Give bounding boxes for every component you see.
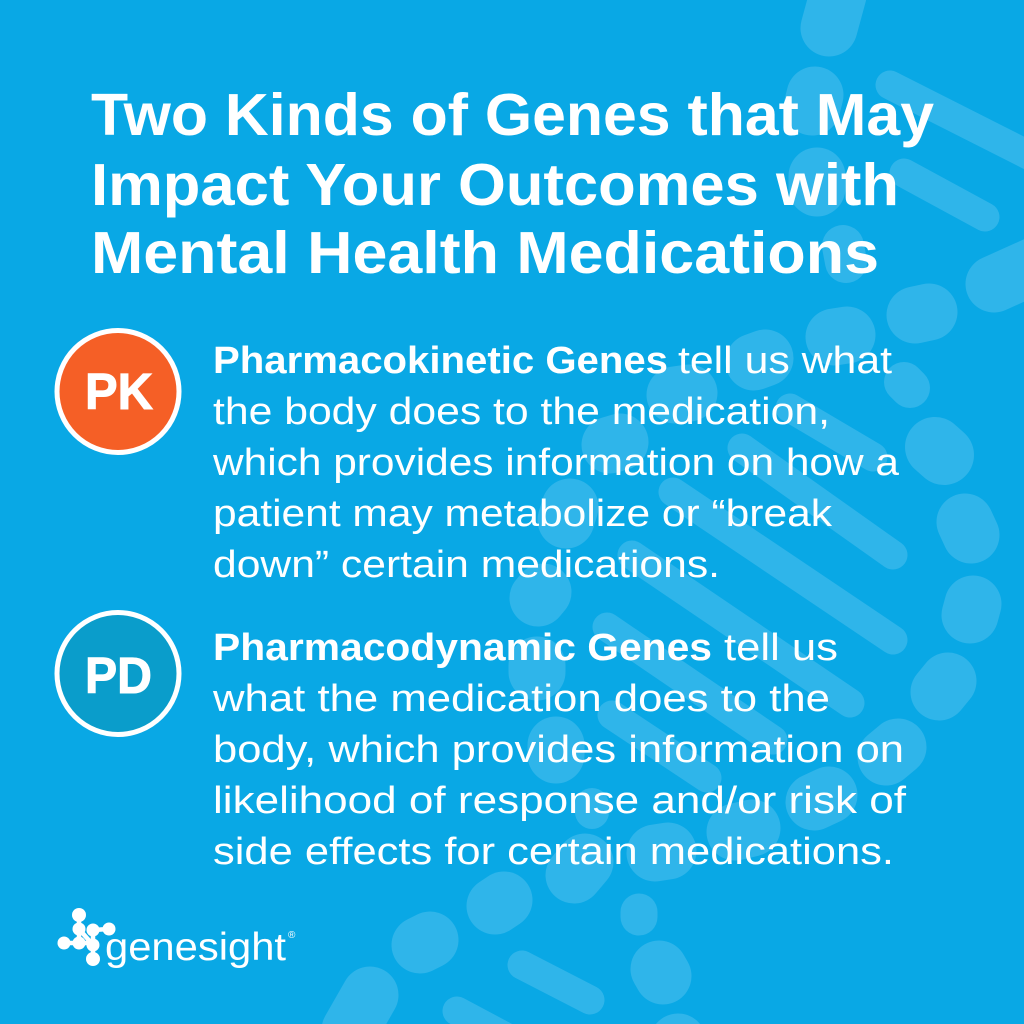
text block: pharmacokinetic genes: the body does to the medication, <box>213 391 830 433</box>
registered mark: ® <box>288 930 296 941</box>
text block: pharmacodynamic genes: tell us <box>724 627 838 669</box>
title <box>91 82 934 286</box>
text block: pharmacodynamic genes: Pharmacodynamic Genes <box>213 627 712 669</box>
text block: pharmacodynamic genes: what the medication does to the <box>212 678 830 720</box>
logo: genesight <box>58 908 296 969</box>
title: Impact Your Outcomes with <box>91 152 899 218</box>
wordmark: genesight <box>105 926 286 969</box>
icon: molecule nodes <box>58 908 116 966</box>
text block: pharmacokinetic genes: which provides information on how a <box>212 442 900 484</box>
text block: pharmacokinetic genes: down” certain medications. <box>213 544 720 586</box>
text block: pharmacodynamic genes <box>212 627 907 873</box>
text block: pharmacodynamic genes: side effects for certain medications. <box>213 831 894 873</box>
text block: pharmacokinetic genes: patient may metabolize or “break <box>213 493 833 535</box>
text block: pharmacodynamic genes: likelihood of response and/or risk of <box>213 780 907 822</box>
background: DNA helix pattern <box>350 0 1024 1024</box>
title: Two Kinds of Genes that May <box>91 82 934 148</box>
title: Mental Health Medications <box>91 220 879 286</box>
text block: pharmacokinetic genes <box>212 340 900 586</box>
text block: pharmacodynamic genes: body, which provides information on <box>213 729 904 771</box>
badge: PD: PD <box>85 647 152 704</box>
badge: PK: PK <box>85 363 153 420</box>
text block: pharmacokinetic genes: Pharmacokinetic Genes <box>213 340 668 382</box>
badge: PK <box>57 330 179 452</box>
badge: PD <box>57 612 179 734</box>
text block: pharmacokinetic genes: tell us what <box>678 340 892 382</box>
